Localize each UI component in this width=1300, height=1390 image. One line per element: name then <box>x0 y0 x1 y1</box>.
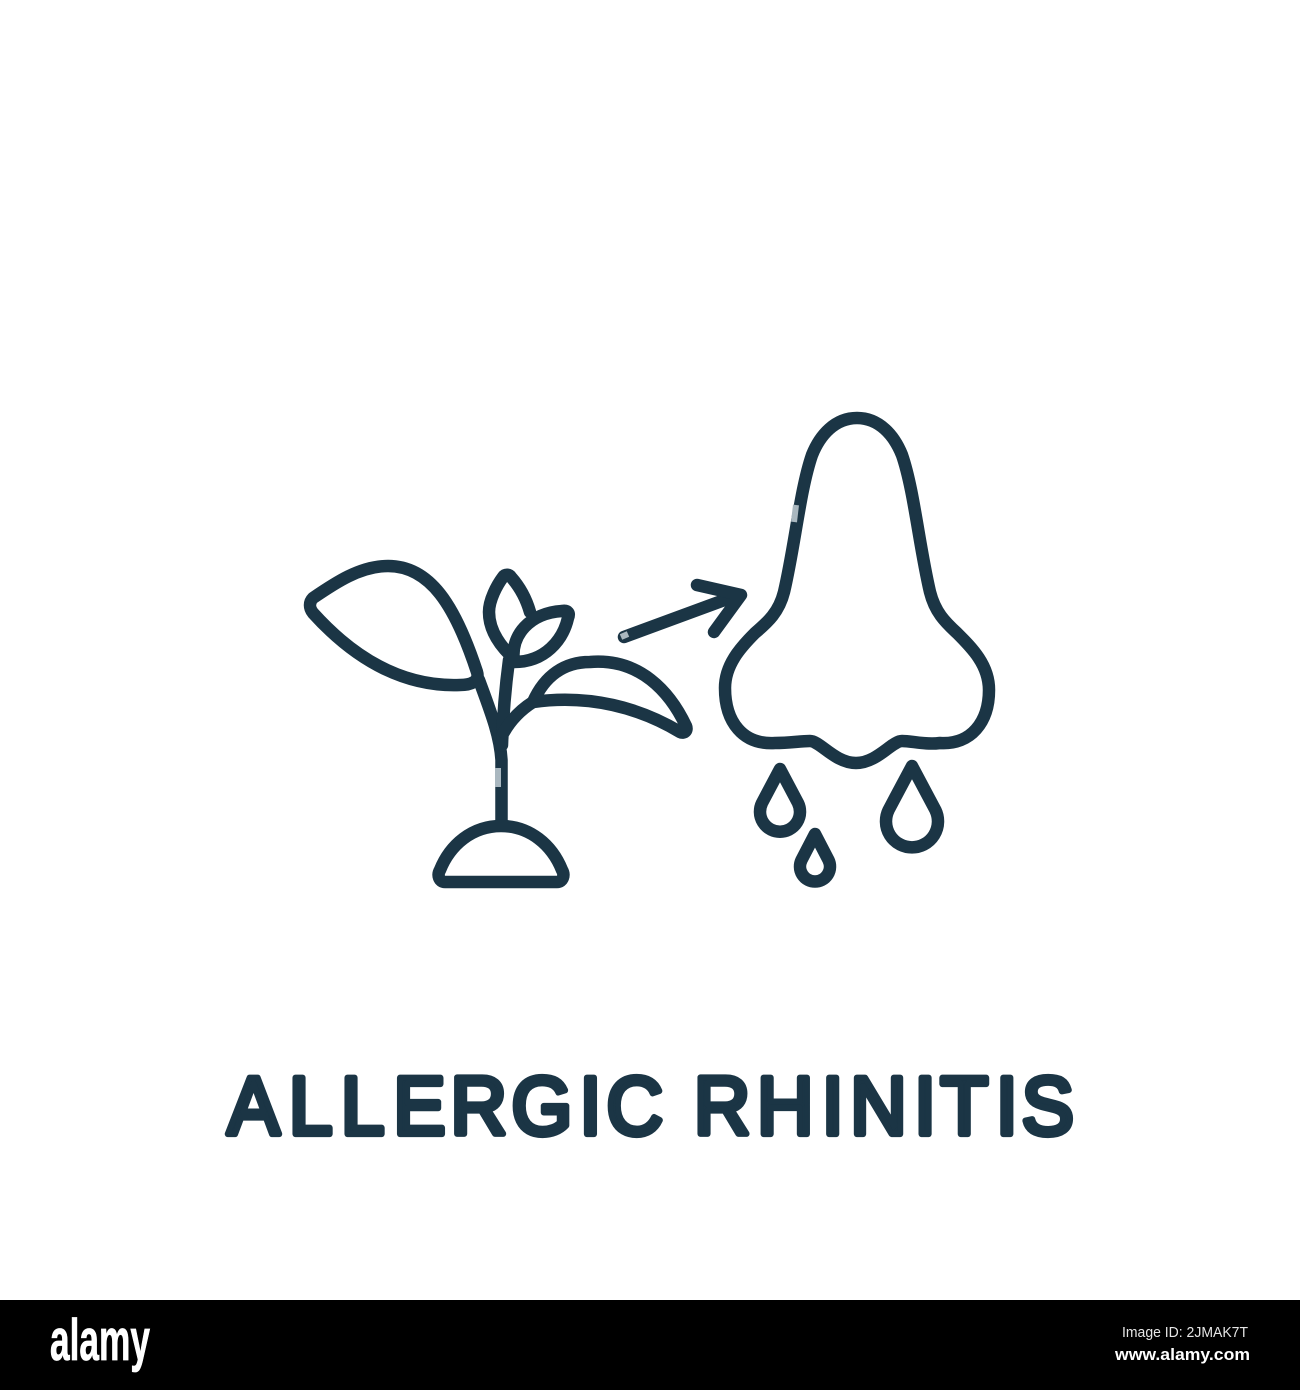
footer logo: alamy <box>50 1308 150 1373</box>
icon: falling drops <box>760 766 938 882</box>
image id: Image ID: 2JMAK7T <box>1122 1324 1248 1341</box>
footer bar <box>0 1300 1300 1390</box>
title: ALLERGIC RHINITIS <box>228 1060 1074 1151</box>
icon: nose <box>725 418 989 763</box>
arrow: plant to nose <box>624 585 741 637</box>
icon: plant <box>310 566 687 882</box>
watermark traces on strokes <box>498 505 796 787</box>
website: www.alamy.com <box>1114 1345 1250 1364</box>
